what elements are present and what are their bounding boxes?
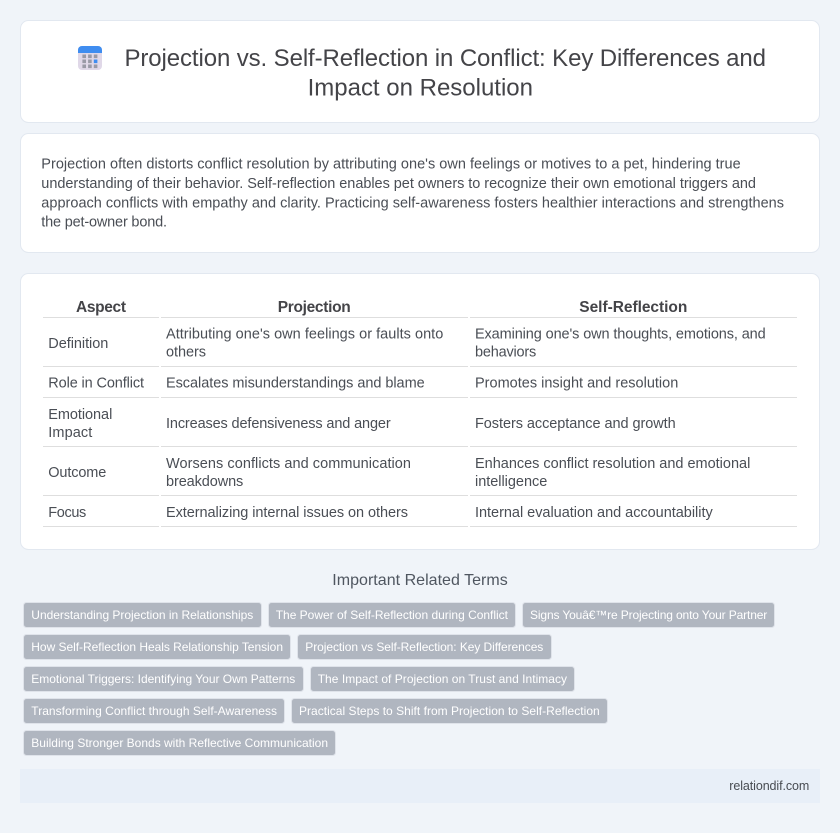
panel: introduction — [20, 134, 820, 252]
text block: introduction paragraph — [41, 157, 784, 231]
table row: role in conflict — [48, 376, 678, 392]
text block: introduction paragraph: the pet-owner bond. — [41, 215, 167, 231]
table row: emotional impact: Fosters acceptance and growth — [475, 416, 676, 432]
table row: emotional impact: Emotional — [48, 407, 112, 423]
tag: Emotional Triggers: Identifying Your Own Patterns — [31, 672, 295, 686]
table row: role in conflict: Escalates misunderstandings and blame — [166, 376, 425, 392]
table row: emotional impact: Impact — [48, 425, 92, 441]
heading: important related terms: Important Related Terms — [332, 572, 508, 589]
tag — [292, 698, 608, 724]
table row: emotional impact: Increases defensiveness and anger — [166, 416, 391, 432]
tag — [298, 634, 552, 660]
title: Impact on Resolution — [308, 74, 533, 102]
tag: Projection vs Self-Reflection: Key Differences — [305, 640, 543, 654]
table row: focus: Externalizing internal issues on others — [166, 505, 408, 521]
table row: focus: Focus — [48, 505, 86, 521]
table row: outcome: Worsens conflicts and communication — [166, 456, 411, 472]
tag — [24, 698, 284, 724]
table row: definition: behaviors — [475, 345, 536, 361]
tag — [310, 666, 574, 692]
table row: definition: Examining one's own thoughts, emotions, and — [475, 327, 766, 343]
footer: relationdif.com — [729, 779, 809, 793]
table row: emotional impact — [48, 407, 676, 441]
title — [124, 45, 766, 102]
tag: Building Stronger Bonds with Reflective Communication — [31, 736, 328, 750]
title: Projection vs. Self-Reflection in Conflict: Key Differences and — [124, 45, 766, 72]
tag — [24, 634, 290, 660]
table row: role in conflict: Promotes insight and resolution — [475, 376, 678, 392]
table header row: Aspect — [76, 299, 126, 316]
panel: comparison table — [20, 274, 820, 550]
table header row: Projection — [278, 299, 351, 316]
footer — [20, 769, 820, 803]
tag — [522, 602, 774, 628]
tag: How Self-Reflection Heals Relationship Tension — [31, 640, 283, 654]
tag: The Impact of Projection on Trust and Intimacy — [318, 672, 567, 686]
text block: introduction paragraph: understanding of their behavior. Self-reflection enables pet owners to recognize their own emotional triggers and — [41, 176, 756, 192]
tag list: related terms — [24, 602, 774, 756]
table row: definition: others — [166, 345, 206, 361]
table row: definition — [48, 327, 766, 361]
table row: outcome: Outcome — [48, 465, 106, 481]
table row: focus — [48, 505, 713, 521]
table row: definition: Attributing one's own feelings or faults onto — [166, 327, 443, 343]
table row: definition: Definition — [48, 336, 108, 352]
tag: Practical Steps to Shift from Projection to Self-Reflection — [299, 704, 600, 718]
table row: role in conflict: Role in Conflict — [48, 376, 144, 392]
tag: The Power of Self-Reflection during Conflict — [276, 608, 509, 622]
panel: header card — [20, 20, 820, 122]
tag — [24, 602, 262, 628]
table row: outcome: Enhances conflict resolution and emotional — [475, 456, 750, 472]
table row: outcome: breakdowns — [166, 474, 243, 490]
tag: Signs Youâ€™re Projecting onto Your Partner — [530, 608, 767, 622]
tag: Transforming Conflict through Self-Awareness — [31, 704, 277, 718]
tag — [268, 602, 516, 628]
table header row: Self-Reflection — [579, 299, 687, 316]
text block: introduction paragraph: Projection often distorts conflict resolution by attributing one's own feelings or motives to a pet, hindering true — [41, 157, 741, 173]
text block: introduction paragraph: approach conflicts with empathy and clarity. Practicing self-awareness fosters healthier interactions and strengthens — [41, 196, 784, 212]
table header row — [76, 299, 687, 316]
table row: focus: Internal evaluation and accountability — [475, 505, 713, 521]
tag: Understanding Projection in Relationships — [31, 608, 253, 622]
tag — [24, 666, 304, 692]
tag — [24, 730, 336, 756]
table row: outcome — [48, 456, 750, 490]
table row: outcome: intelligence — [475, 474, 547, 490]
icon: calendar — [78, 46, 102, 70]
